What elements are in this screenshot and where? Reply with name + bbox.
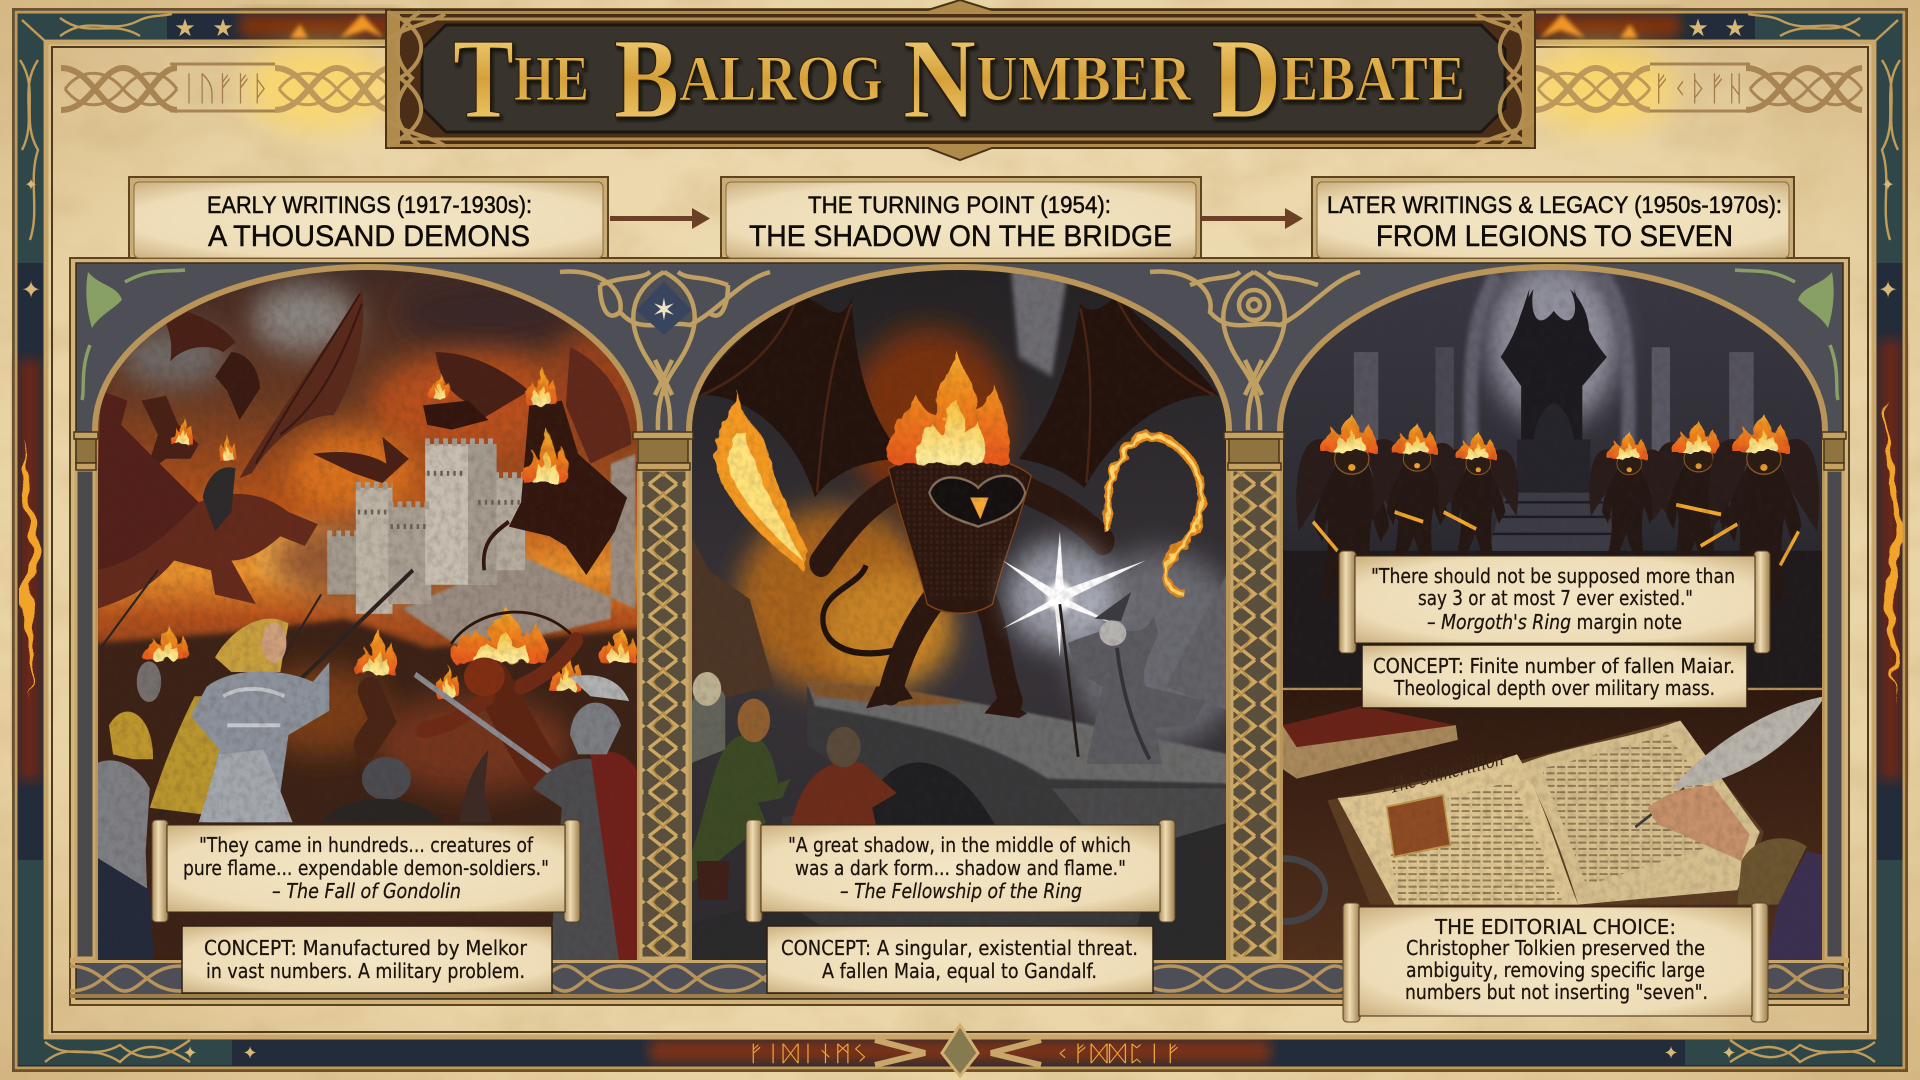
header box: later writings: LATER WRITINGS & LEGACY (1950s-1970s): [1327, 192, 1782, 219]
spandrel leaf: left [82, 270, 185, 400]
scene 2: balrog face [929, 476, 1025, 527]
scene 2: balrog wings [697, 289, 1219, 498]
header box: early writings: EARLY WRITINGS (1917-1930s): [207, 192, 532, 219]
title text: N [903, 15, 976, 142]
scene 2: fellowship companions [689, 672, 897, 900]
rune band: top left [61, 46, 395, 130]
scene 1: gold helmet soldier [95, 711, 154, 960]
bottom band ornament and runes [747, 1025, 1182, 1076]
spandrel knot: star [560, 272, 770, 430]
scene 2: the shadow on the bridge [660, 260, 1300, 1020]
title text: T [453, 15, 514, 142]
pillar capitals [74, 432, 1846, 470]
scroll quote: Fall of Gondolin: – The Fall of Gondolin [272, 879, 461, 903]
scroll: the editorial choice: numbers but not inserting "seven". [1405, 980, 1708, 1004]
scene 1: right soldier [533, 675, 639, 960]
border stars: ✦ [1663, 1043, 1679, 1064]
main illustrated panel frame [70, 258, 1849, 1005]
title banner [386, 0, 1535, 160]
scene 1: elf warrior [150, 619, 329, 822]
concept box: singular threat: CONCEPT: A singular, existential threat. [781, 936, 1138, 960]
scene 3: balrog: right [1651, 420, 1746, 581]
title text: B [614, 15, 679, 142]
concept box: manufactured [182, 926, 552, 993]
border fire: bottom band [650, 1040, 1270, 1062]
scene 1: castle demon [484, 347, 631, 575]
scene 3: balrog: far right [1708, 413, 1819, 602]
scene 3: balrog: near right [1589, 431, 1669, 567]
scene 3: quill and hand [1635, 696, 1827, 963]
scene 1: dark crowd [98, 615, 637, 862]
scroll: the editorial choice: THE EDITORIAL CHOICE: [1434, 915, 1676, 939]
pillar shafts [76, 470, 1843, 958]
border fire: top band left [240, 14, 400, 38]
concept box: manufactured: in vast numbers. A military problem. [206, 959, 525, 983]
title text: UMBER [976, 43, 1192, 115]
header box: later writings [1312, 177, 1794, 258]
scene 1: flames [143, 367, 638, 696]
border stars: ✦ [1881, 175, 1895, 194]
scroll quote: Morgoth's Ring: say 3 or at most 7 ever existed." [1418, 586, 1693, 610]
scene 1: castle [327, 442, 635, 653]
title corner knots [388, 12, 1533, 146]
scene 3: desk background [1260, 689, 1900, 1020]
scene 1: bald fighters [137, 661, 492, 822]
header box: turning point: THE TURNING POINT (1954): [808, 192, 1111, 219]
header box: turning point [721, 177, 1201, 258]
border fire: left band [19, 360, 40, 780]
border stars: ★ [1724, 14, 1746, 42]
border stars: ✦ [21, 276, 41, 304]
arch outlines [95, 267, 1825, 960]
scene 3: balrog: far left [1296, 413, 1407, 602]
scene 3: hall pillars and light [1260, 260, 1900, 689]
border stars: ✦ [1721, 1043, 1737, 1064]
arrow: early to turning point [610, 208, 710, 229]
scene 2: cavern lighting [689, 270, 1248, 745]
scene 2: foreground rocks [689, 822, 1229, 1020]
concept box: singular threat [767, 926, 1153, 993]
scene 3: closed book [1282, 706, 1458, 779]
scene 3: flame swords [1313, 505, 1799, 565]
scene 1: red dragon and rider [97, 289, 364, 609]
scene 3: throne [1488, 289, 1619, 551]
rune band: top right [1525, 46, 1862, 130]
scene 1: sky smoke and fire clouds [93, 279, 652, 609]
header box: turning point: THE SHADOW ON THE BRIDGE [749, 220, 1172, 253]
scene 3: ring [1244, 859, 1325, 922]
border stars: ✦ [242, 1043, 258, 1064]
border fire: right band [1880, 340, 1901, 780]
scene 2: balrog tail [823, 565, 905, 653]
title text: ALROG [679, 43, 883, 115]
arch and pillar architecture [74, 267, 1846, 960]
scene 3: the seven before the throne [1244, 260, 1900, 1020]
scroll quote: Morgoth's Ring: – Morgoth's Ring margin note [1427, 610, 1682, 634]
concept box: singular threat: A fallen Maia, equal to Gandalf. [822, 959, 1097, 983]
concept box: finite number: CONCEPT: Finite number of fallen Maiar. [1373, 654, 1735, 678]
scene 2: balrog body [821, 455, 1103, 718]
scroll quote: Fellowship of the Ring: was a dark form... shadow and flame." [795, 856, 1126, 880]
scroll quote: Fall of Gondolin [152, 820, 580, 922]
scroll quote: Fellowship of the Ring [746, 820, 1175, 922]
scroll quote: Fall of Gondolin: "They came in hundreds... creatures of [199, 833, 534, 857]
scene 2: gandalf light burst [1003, 531, 1146, 657]
bottom band ornament and runes: ᚲᚠᛞᛞᛈᛁᚠ [1053, 1042, 1182, 1067]
scroll quote: Fall of Gondolin: pure flame... expendable demon-soldiers." [183, 856, 549, 880]
scroll quote: Fellowship of the Ring: "A great shadow, in the middle of which [788, 833, 1131, 857]
border stars: ★ [212, 14, 234, 42]
border stars: ★ [174, 14, 196, 42]
header box: early writings [129, 177, 608, 258]
scene 3: balrog: left [1373, 422, 1461, 574]
scene 2: bridge [782, 682, 1229, 1020]
title text [453, 15, 1465, 142]
scroll: the editorial choice: ambiguity, removing specific large [1406, 958, 1705, 982]
concept box: finite number [1362, 645, 1747, 708]
scroll: the editorial choice: Christopher Tolkien preserved the [1406, 936, 1705, 960]
scene 2: fire whip [1107, 437, 1201, 594]
title text: D [1211, 15, 1281, 142]
bottom band ornament and runes: ᚠᛁᛞᛁᚾᛗᛊ [747, 1042, 869, 1067]
concept box: manufactured: CONCEPT: Manufactured by Melkor [204, 936, 528, 960]
border stars: ★ [1687, 14, 1709, 42]
scene 3: open book [1327, 720, 1764, 905]
spandrel knot: star: ✶ [651, 293, 677, 328]
spandrel leaf: right [1735, 270, 1838, 400]
scene 1: spears [101, 570, 566, 817]
scene 3: open book: The Silmerillion [1387, 744, 1505, 798]
border stars: ✦ [182, 1043, 198, 1064]
concept box: finite number: Theological depth over military mass. [1393, 676, 1715, 700]
border stars: ✦ [24, 175, 38, 194]
scroll quote: Morgoth's Ring: "There should not be supposed more than [1371, 564, 1735, 588]
scene 3: balrog: near left [1438, 431, 1518, 567]
rune band: top right: ᚠᚲᚦᚠᚺ [1652, 69, 1745, 109]
header box: later writings: FROM LEGIONS TO SEVEN [1376, 220, 1733, 253]
scroll: the editorial choice [1343, 903, 1768, 1022]
scene 1: flame demon [366, 612, 576, 774]
title text: HE [514, 43, 589, 115]
scene 1: flying demons [142, 304, 529, 483]
border fire: top band right [1530, 14, 1680, 38]
scroll quote: Morgoth's Ring [1339, 551, 1770, 653]
rune band: top left: ᛁᚢᚠᚠᚦ [180, 69, 270, 109]
title text: EBATE [1281, 43, 1465, 115]
arrow: turning point to later writings [1202, 208, 1303, 229]
scene 1: battle of Gondolin [60, 260, 700, 1020]
border stars: ✦ [1878, 276, 1898, 304]
spandrel knot: rosette [1150, 272, 1360, 430]
scroll quote: Fellowship of the Ring: – The Fellowship of the Ring [840, 879, 1082, 903]
header box: early writings: A THOUSAND DEMONS [208, 220, 530, 253]
scene 2: gandalf [1060, 592, 1207, 764]
scene 2: balrog flames [713, 349, 1010, 570]
